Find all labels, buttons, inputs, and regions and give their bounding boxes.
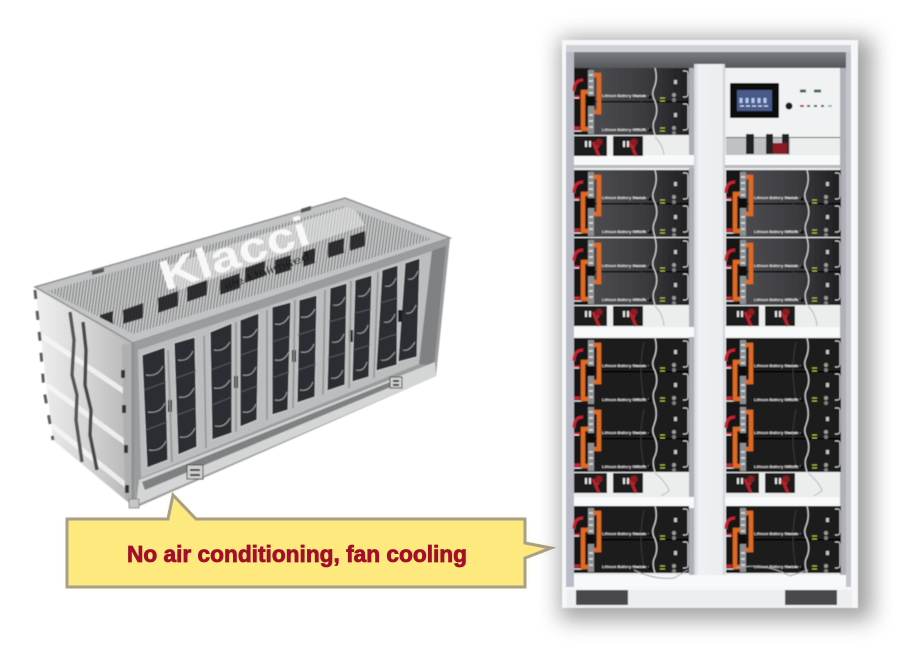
shelves	[574, 155, 846, 587]
callout text: No air conditioning, fan cooling	[127, 541, 467, 567]
logo text: Klacci	[153, 207, 315, 300]
cabinet base with feet	[562, 587, 858, 608]
breaker strip	[726, 134, 840, 155]
battery modules left column: Lithium Battery Module	[602, 564, 647, 569]
battery modules right column: Lithium Battery Module	[754, 397, 799, 402]
battery modules right column: Lithium Battery Module	[754, 531, 799, 536]
cabinet shadow	[560, 38, 872, 620]
callout	[67, 493, 553, 587]
battery cabinet	[560, 38, 872, 620]
battery modules right column: Lithium Battery Module	[754, 430, 799, 435]
battery modules left column: Lithium Battery Module	[602, 363, 647, 368]
battery modules left column: Lithium Battery Module	[602, 127, 647, 132]
battery modules left column: Lithium Battery Module	[602, 229, 647, 234]
battery modules right column: Lithium Battery Module	[754, 195, 799, 200]
battery modules left column: Lithium Battery Module	[602, 297, 647, 302]
touch screen	[730, 83, 779, 118]
battery modules right column: Lithium Battery Module	[754, 363, 799, 368]
center column	[694, 64, 725, 576]
battery modules right column: Lithium Battery Module	[754, 229, 799, 234]
control panel	[726, 68, 840, 155]
battery modules left column: Lithium Battery Module	[602, 464, 647, 469]
logo tagline: life Unlimited	[223, 251, 312, 293]
container top with mesh and logo	[35, 198, 450, 343]
battery modules left column	[574, 68, 689, 573]
container front with door cabinets	[129, 238, 450, 508]
cable connectors	[574, 136, 822, 578]
battery modules left column: Lithium Battery Module	[602, 430, 647, 435]
battery modules left column: Lithium Battery Module	[602, 195, 647, 200]
battery modules right column: Lithium Battery Module	[754, 297, 799, 302]
cabinet frame	[562, 40, 858, 608]
door handles	[170, 310, 400, 412]
lock boxes	[187, 377, 402, 479]
battery modules right column	[726, 170, 841, 573]
indicator lights	[800, 105, 804, 107]
battery modules right column: Lithium Battery Module	[754, 564, 799, 569]
callout glow	[67, 493, 553, 587]
switches	[800, 90, 821, 92]
battery modules left column: Lithium Battery Module	[602, 263, 647, 268]
container left end with doors	[35, 287, 135, 508]
door panels	[142, 258, 420, 468]
battery modules left column: Lithium Battery Module	[602, 531, 647, 536]
cable arcs in doors	[146, 271, 418, 450]
callout box	[67, 495, 551, 587]
container illustration	[35, 198, 450, 508]
battery modules right column: Lithium Battery Module	[754, 464, 799, 469]
battery modules left column: Lithium Battery Module	[602, 397, 647, 402]
key switch	[786, 102, 792, 110]
battery modules right column: Lithium Battery Module	[754, 263, 799, 268]
battery modules left column: Lithium Battery Module	[602, 93, 647, 98]
